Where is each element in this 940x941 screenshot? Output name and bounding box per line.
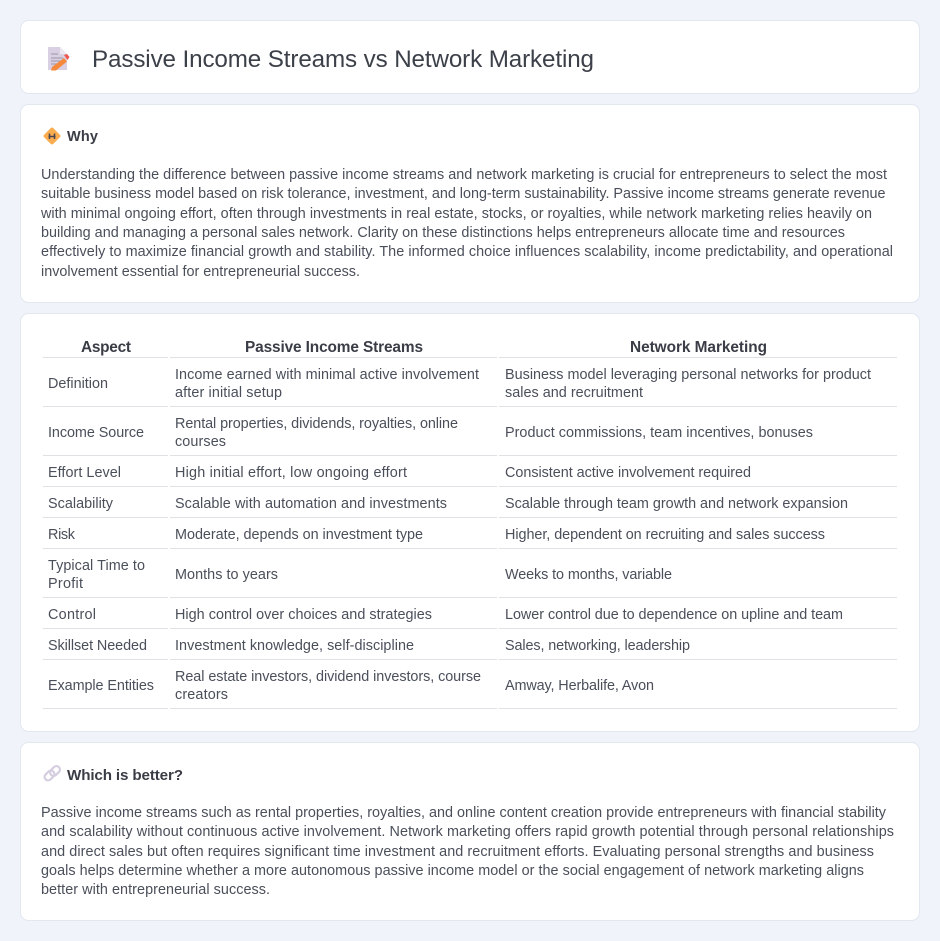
heading: which is better: Which is better?: [67, 767, 183, 784]
row: skillset needed: [48, 638, 690, 654]
table header: Aspect: [81, 339, 131, 356]
panel: which is better: [20, 742, 920, 920]
text block: why paragraph: Understanding the difference between passive income streams and network marketing is crucial for entrepreneurs to select the most: [41, 167, 887, 183]
row: definition: Definition: [48, 376, 108, 392]
row: risk: Risk: [48, 527, 76, 543]
panel: why: [20, 104, 920, 302]
title: Passive Income Streams vs Network Marketing: [92, 46, 594, 73]
row: definition: after initial setup: [175, 385, 282, 401]
row: definition: sales and recruitment: [505, 385, 643, 401]
row: risk: [48, 527, 825, 543]
row: typical time to profit: Months to years: [175, 567, 278, 583]
text block: which is better paragraph: Passive income streams such as rental properties, royalties, and online content creation provide entrepreneurs with financial stability: [41, 805, 887, 821]
row: skillset needed: Skillset Needed: [48, 638, 147, 654]
row: effort level: Consistent active involvement required: [505, 465, 751, 481]
row: typical time to profit: Typical Time to: [48, 558, 145, 574]
row: control: Control: [48, 607, 96, 623]
row: definition: Income earned with minimal active involvement: [175, 367, 479, 383]
row: example entities: creators: [175, 687, 228, 703]
row: risk: Higher, dependent on recruiting and sales success: [505, 527, 825, 543]
row: control: High control over choices and strategies: [175, 607, 432, 623]
text block: which is better paragraph: and direct sales but often requires significant time investment and recruitment efforts. Evaluating personal strengths and business: [41, 844, 874, 860]
row: scalability: Scalability: [48, 496, 114, 512]
panel: comparison table: [20, 314, 920, 732]
row: effort level: High initial effort, low ongoing effort: [175, 465, 407, 481]
row: effort level: [48, 465, 751, 481]
row: income source: courses: [175, 434, 226, 450]
table header: [81, 339, 767, 356]
row: definition: [48, 367, 871, 401]
row: example entities: Example Entities: [48, 678, 154, 694]
row: typical time to profit: Weeks to months, variable: [505, 567, 672, 583]
row: scalability: Scalable with automation and investments: [175, 496, 447, 512]
icon: document with pencil: [48, 47, 70, 70]
heading: why: Why: [67, 129, 98, 145]
text block: why paragraph: with minimal ongoing effort, often through investments in real estate, stocks, or royalties, while network marketing relies heavily on: [40, 206, 872, 222]
row: income source: Rental properties, dividends, royalties, online: [175, 416, 458, 432]
table header: Network Marketing: [630, 339, 767, 356]
row: skillset needed: Investment knowledge, self-discipline: [175, 638, 414, 654]
row: definition: Business model leveraging personal networks for product: [505, 367, 871, 383]
row: example entities: Amway, Herbalife, Avon: [505, 678, 654, 694]
icon: diamond warning sign: [43, 127, 61, 145]
row: typical time to profit: [48, 558, 672, 592]
table header: Passive Income Streams: [245, 339, 423, 356]
row: control: Lower control due to dependence on upline and team: [505, 607, 843, 623]
row: control: [48, 607, 843, 623]
row: income source: Product commissions, team incentives, bonuses: [505, 425, 813, 441]
row: typical time to profit: Profit: [48, 576, 83, 592]
text block: which is better paragraph: and scalability without continuous active involvement. Network marketing offers rapid growth potential through personal relationships: [41, 824, 894, 840]
panel: title card: [20, 20, 920, 94]
row: example entities: [48, 669, 654, 703]
row: scalability: Scalable through team growth and network expansion: [505, 496, 848, 512]
icon: chain link: [43, 765, 61, 782]
row: risk: Moderate, depends on investment type: [175, 527, 423, 543]
text block: why paragraph: [40, 167, 893, 280]
text block: why paragraph: building and managing a personal sales network. Clarity on these distinctions helps entrepreneurs allocate time and resources: [41, 225, 845, 241]
row: skillset needed: Sales, networking, leadership: [505, 638, 690, 654]
text block: why paragraph: effectively to maximize financial growth and stability. The informed choice influences scalability, income predictability, and operational: [41, 244, 893, 260]
text block: why paragraph: suitable business model based on risk tolerance, investment, and long-term sustainability. Passive income streams generate revenue: [41, 186, 886, 202]
text block: which is better paragraph: [41, 805, 894, 898]
row: income source: Income Source: [48, 425, 144, 441]
row: income source: [48, 416, 813, 450]
row: effort level: Effort Level: [48, 465, 121, 481]
row: example entities: Real estate investors, dividend investors, course: [175, 669, 481, 685]
text block: why paragraph: involvement essential for entrepreneurial success.: [41, 264, 360, 280]
text block: which is better paragraph: goals helps determine whether a more autonomous passive income model or the social engagement of network marketing aligns: [41, 863, 864, 879]
text block: which is better paragraph: better with entrepreneurial success.: [41, 882, 270, 898]
row: scalability: [48, 496, 848, 512]
